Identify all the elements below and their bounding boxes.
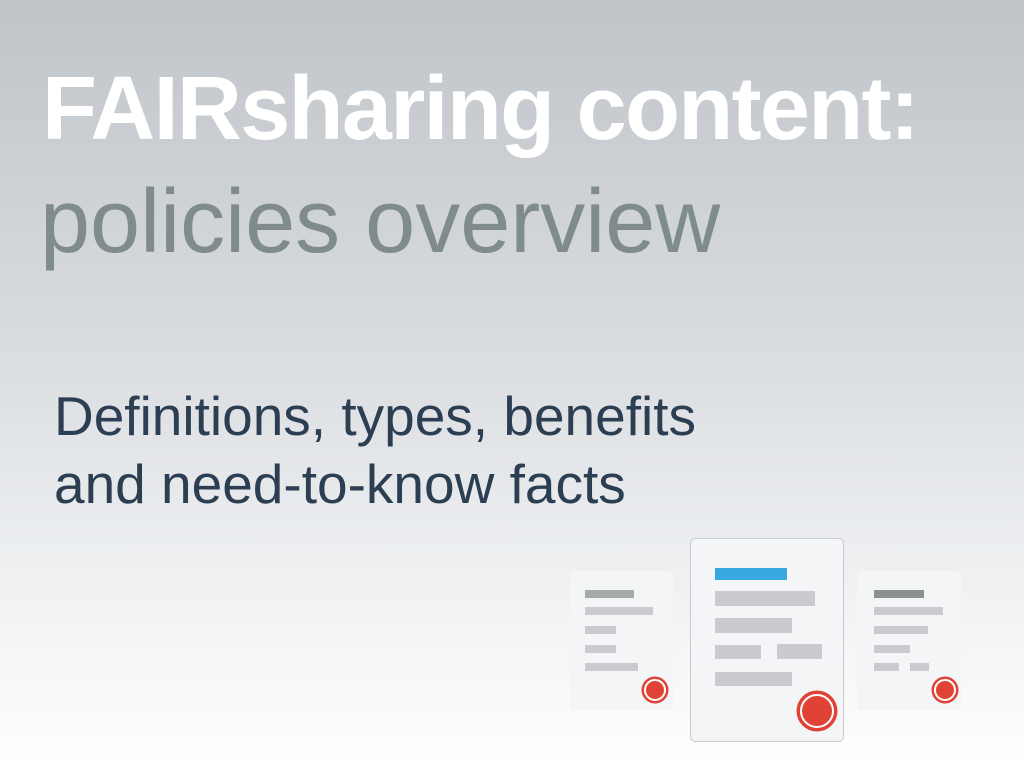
icon: right document xyxy=(857,571,961,710)
text block: description: and need-to-know facts xyxy=(54,453,626,515)
subtitle: policies overview: policies overview xyxy=(40,172,720,272)
text block: description xyxy=(54,385,696,515)
title: FAIRsharing content: xyxy=(42,59,918,159)
icon: left document xyxy=(570,571,673,710)
icon: center document xyxy=(690,538,844,742)
icon: policy documents xyxy=(585,538,958,742)
text block: description: Definitions, types, benefits xyxy=(54,385,696,447)
